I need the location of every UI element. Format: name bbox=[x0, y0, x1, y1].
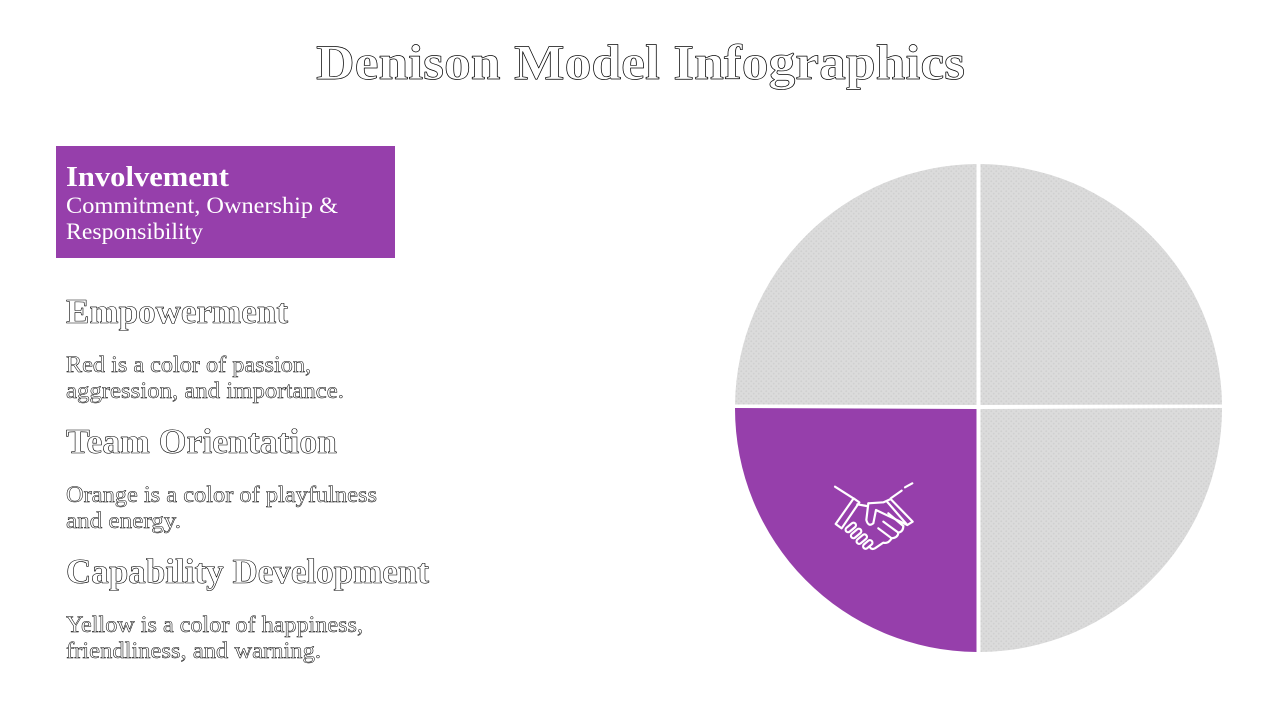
text: empowerment description: aggression, and importance. bbox=[66, 378, 344, 403]
heading: capability development: Capability Development bbox=[66, 552, 429, 591]
icon: handshake bbox=[835, 483, 913, 550]
segment: top left bbox=[735, 164, 976, 405]
segment: bottom left highlighted bbox=[735, 408, 976, 652]
text: capability development description: Yellow is a color of happiness, bbox=[66, 612, 363, 637]
text: team orientation description: Orange is a color of playfulness bbox=[66, 482, 377, 507]
text: capability development description: friendliness, and warning. bbox=[66, 638, 321, 663]
segment: bottom right bbox=[980, 408, 1222, 652]
chart: quadrant pie bbox=[735, 164, 1222, 652]
text: empowerment description: Red is a color of passion, bbox=[66, 352, 311, 377]
text: involvement description: Commitment, Ownership & bbox=[66, 193, 338, 218]
heading: team orientation: Team Orientation bbox=[66, 422, 337, 461]
title: Denison Model Infographics bbox=[316, 34, 965, 90]
segment: top right bbox=[980, 164, 1222, 405]
panel: involvement bbox=[56, 146, 395, 258]
text: team orientation description: and energy. bbox=[66, 508, 181, 533]
heading: involvement: Involvement bbox=[66, 161, 229, 193]
heading: empowerment: Empowerment bbox=[66, 292, 288, 331]
text: involvement description: Responsibility bbox=[66, 219, 204, 244]
